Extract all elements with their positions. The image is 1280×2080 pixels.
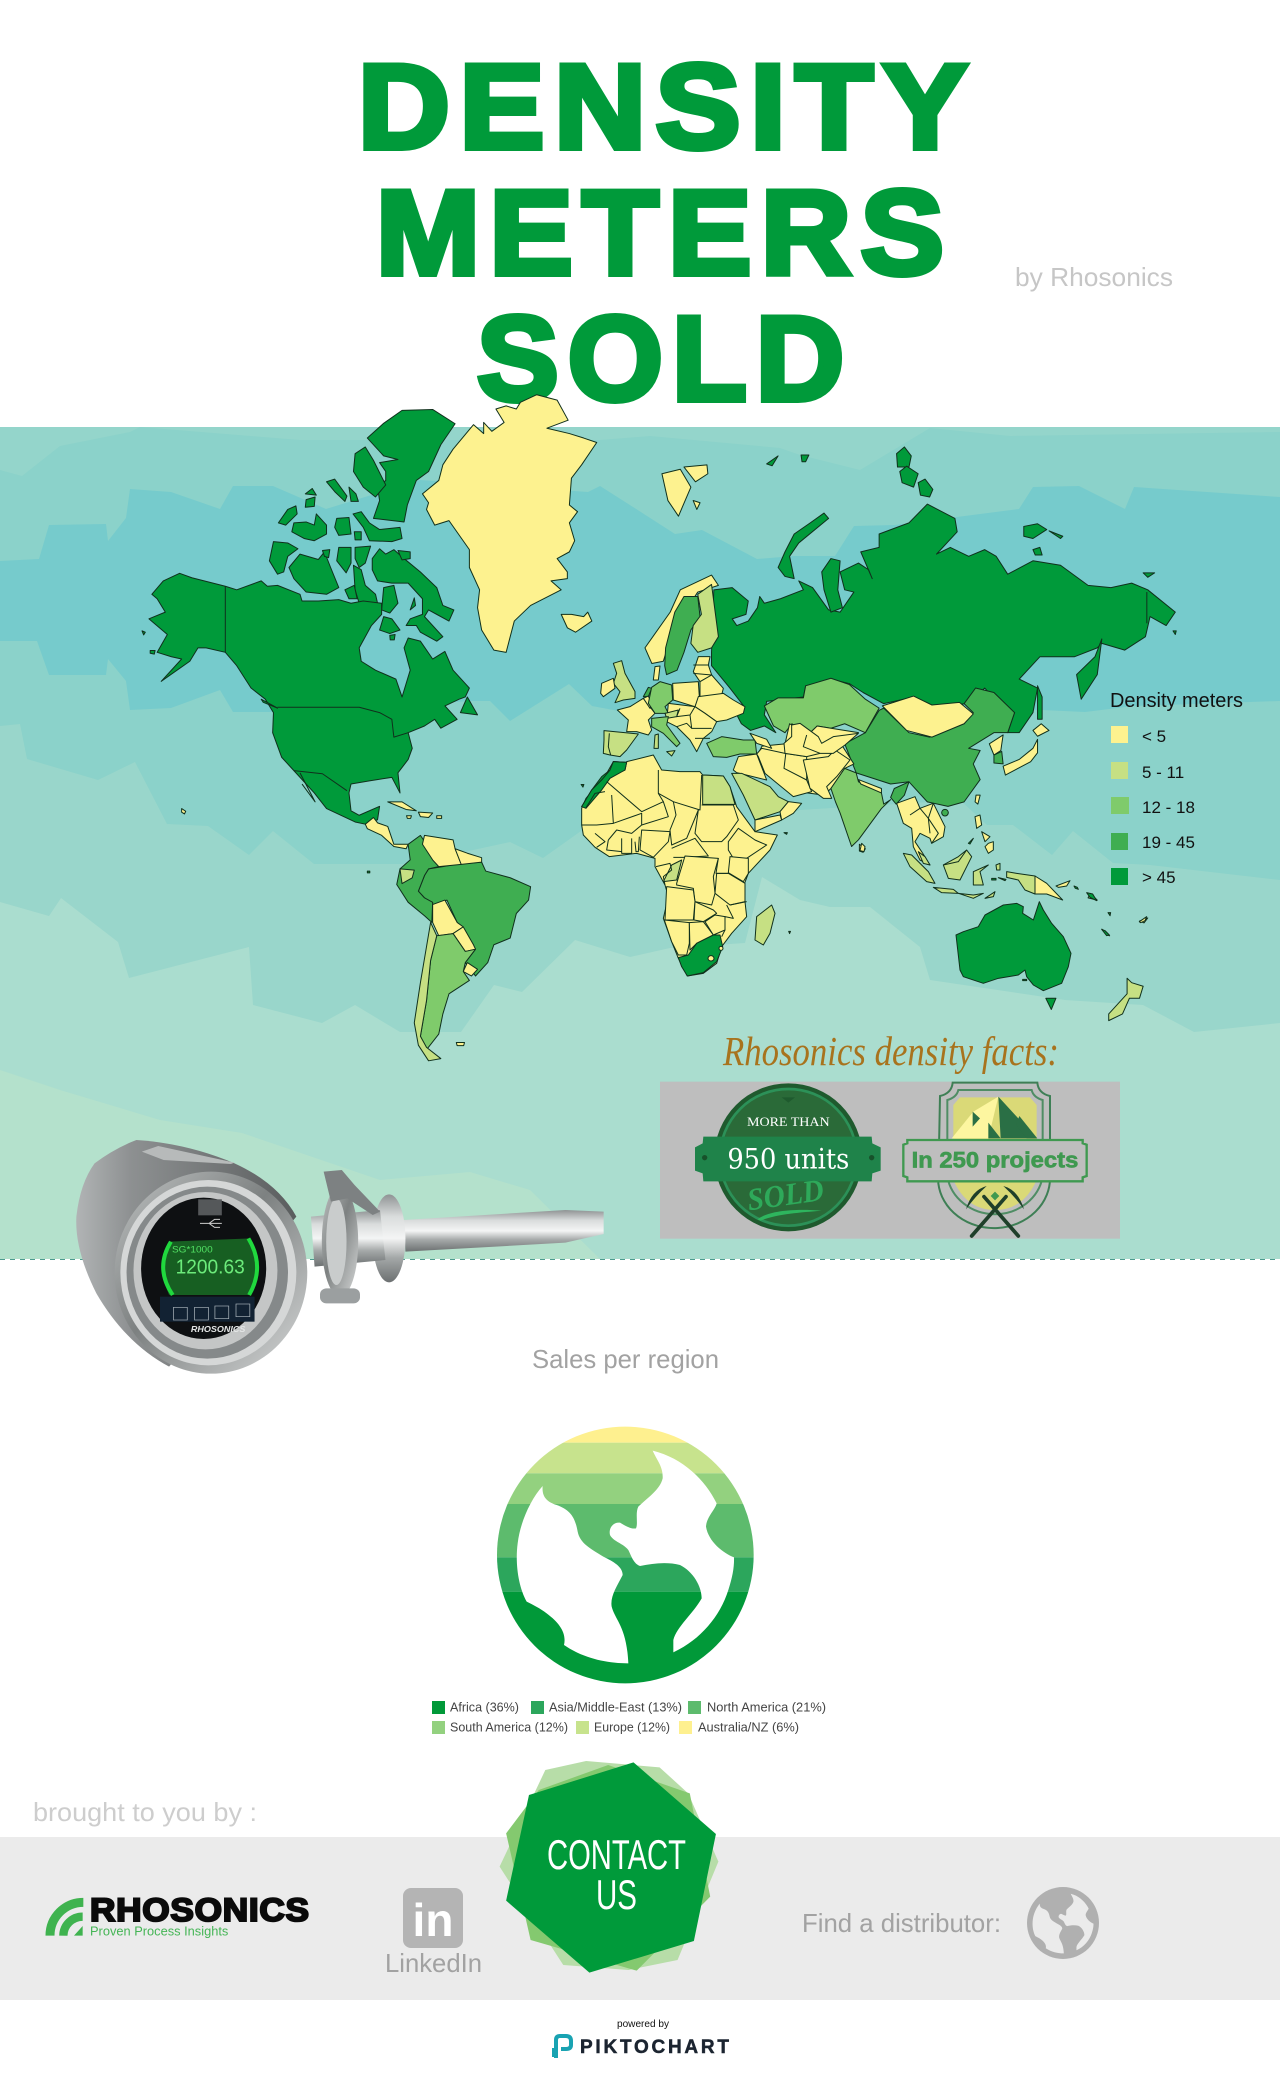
legend: density meters: Density meters <box>1110 690 1243 712</box>
contact us button: CONTACT <box>547 1831 686 1878</box>
icon: linkedin <box>403 1888 463 1948</box>
badge: 950 units sold <box>695 1083 881 1231</box>
title: SOLD <box>477 291 844 426</box>
density meter device image: SG*1000 <box>172 1244 213 1255</box>
title <box>358 40 967 426</box>
heading: sales per region: Sales per region <box>532 1344 719 1374</box>
icon: globe <box>1027 1887 1099 1959</box>
flange <box>373 1194 405 1282</box>
rhosonics logo: RHOSONICS <box>90 1893 310 1929</box>
rhosonics logo: Proven Process Insights <box>90 1924 229 1939</box>
dashed divider line <box>0 1258 1280 1260</box>
chart legend: regions: North America (21%) <box>707 1700 826 1714</box>
africa and arabia <box>582 755 802 976</box>
display <box>163 1238 257 1295</box>
legend: density meters: > 45 <box>1142 868 1176 887</box>
text: powered by: powered by <box>617 2019 669 2030</box>
legend: density meters: < 5 <box>1142 727 1166 746</box>
title: DENSITY <box>358 40 967 174</box>
text: linkedin label: LinkedIn <box>385 1948 482 1978</box>
globe chart: sales share <box>493 1423 760 1688</box>
chart legend: regions: Australia/NZ (6%) <box>698 1720 799 1734</box>
panel: fact badges <box>660 1082 1120 1239</box>
badge: 950 units sold: MORE THAN <box>747 1115 830 1129</box>
title: METERS <box>376 165 944 299</box>
density meter device image: RHOSONICS <box>191 1324 246 1334</box>
badge: 950 units sold: 950 units <box>727 1142 849 1175</box>
clamp <box>322 1187 358 1297</box>
piktochart logo: PIKTOCHART <box>580 2037 729 2058</box>
contact us button: US <box>596 1871 637 1918</box>
legend: density meters: 19 - 45 <box>1142 833 1195 852</box>
europe and near east <box>582 657 865 852</box>
density meter device image: 1200.63 <box>176 1256 245 1278</box>
badge: 250 projects <box>903 1083 1087 1236</box>
legend: density meters: 5 - 11 <box>1142 763 1184 782</box>
density meter device image <box>76 1140 604 1374</box>
legend: density meters <box>1110 690 1243 887</box>
badge: 950 units sold: SOLD <box>745 1172 826 1217</box>
chart legend: regions <box>432 1700 826 1734</box>
chart legend: regions: Africa (36%) <box>450 1700 519 1714</box>
badge: 250 projects: In 250 projects <box>912 1147 1078 1172</box>
housing <box>76 1140 296 1367</box>
panel: footer band <box>0 1837 1280 2000</box>
south east asia and oceania <box>897 797 1147 991</box>
text: find a distributor: Find a distributor: <box>802 1908 1001 1938</box>
byline: by Rhosonics <box>1015 262 1173 292</box>
panel: map background waves <box>0 427 1280 1259</box>
eurasia and northern islands <box>581 447 1176 1021</box>
chart legend: regions: South America (12%) <box>450 1720 568 1734</box>
north and south america <box>142 395 597 1061</box>
rhosonics logo <box>50 1893 310 1939</box>
heading: density facts: Rhosonics density facts: <box>722 1028 1059 1074</box>
pipe <box>404 1210 604 1252</box>
chart legend: regions: Asia/Middle-East (13%) <box>549 1700 682 1714</box>
chart legend: regions: Europe (12%) <box>594 1720 670 1734</box>
legend: density meters: 12 - 18 <box>1142 798 1195 817</box>
world choropleth map <box>142 395 1176 1061</box>
contact us button <box>500 1761 718 1973</box>
text: brought to you by: brought to you by : <box>33 1797 257 1827</box>
icon: linkedin: in <box>413 1894 453 1946</box>
